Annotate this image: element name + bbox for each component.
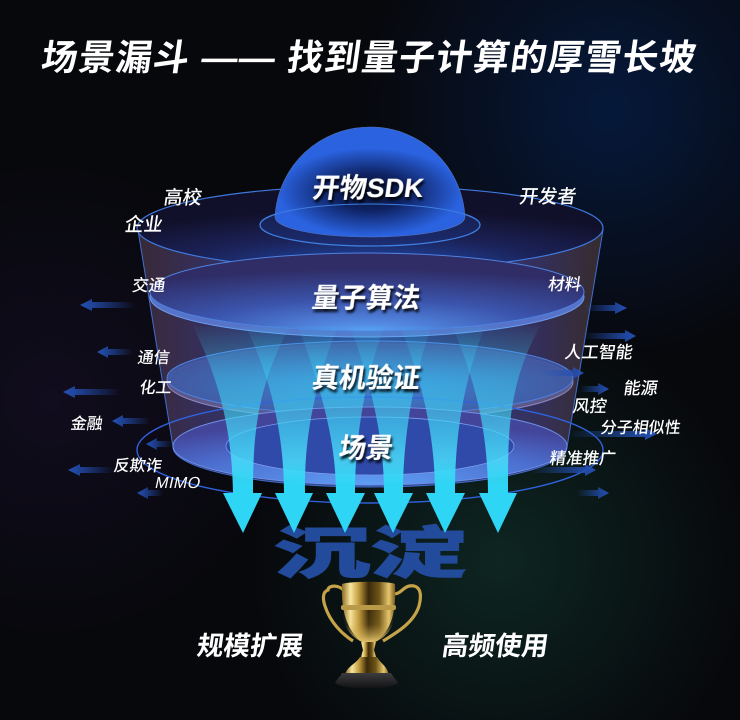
- right arrow: mid: [540, 367, 584, 379]
- arrow 3: [298, 326, 385, 533]
- right arrow: molecular similarity: [567, 428, 657, 440]
- left arrow: finance: [112, 415, 150, 427]
- layer 4 inner ellipse: [226, 417, 514, 475]
- label: scale expansion: 规模扩展: [195, 631, 305, 661]
- right arrow: materials: [585, 302, 627, 314]
- side labels: [69, 186, 682, 492]
- label: high frequency use: 高频使用: [440, 631, 550, 661]
- dome: [275, 127, 465, 237]
- layer 1 disc: [137, 186, 603, 270]
- arrow 1: [193, 326, 290, 533]
- layer 3 disc: [167, 341, 573, 415]
- inner ring under dome: [260, 204, 480, 246]
- funnel arrows: [193, 326, 540, 533]
- arrow 6: [452, 326, 540, 533]
- label: molecular similarity: 分子相似性: [599, 419, 682, 437]
- trophy foot: [345, 657, 389, 675]
- dome ring front: [260, 204, 480, 225]
- right arrow: AI: [583, 330, 636, 342]
- label: risk control: 风控: [571, 397, 608, 416]
- trophy right handle: [383, 586, 420, 641]
- label: precision marketing: 精准推广: [548, 449, 617, 468]
- trophy left handle: [323, 586, 353, 641]
- funnel body: [138, 230, 603, 487]
- arrow 2: [245, 326, 338, 533]
- layer 4 outer ring: [137, 397, 603, 503]
- label: universities: 高校: [162, 187, 203, 209]
- layer 4 disc: [173, 407, 567, 485]
- label: enterprises: 企业: [123, 214, 164, 236]
- layer 2 rim: [150, 257, 584, 337]
- trophy band: [341, 605, 396, 610]
- arrow 5: [400, 326, 485, 533]
- left arrow: telecom: [97, 346, 133, 358]
- label: chemical: 化工: [138, 379, 173, 397]
- label: AI: 人工智能: [563, 343, 634, 362]
- label: anti-fraud: 反欺诈: [112, 457, 163, 475]
- left arrow: mid: [146, 438, 172, 450]
- icon: trophy: [323, 582, 420, 688]
- left arrow: mimo: [137, 487, 163, 499]
- trophy stem: [360, 642, 377, 660]
- left arrow: chemical: [63, 386, 120, 398]
- label: developers: 开发者: [518, 186, 578, 208]
- layer 3 rim: [167, 344, 573, 420]
- left arrow: transport: [80, 299, 135, 311]
- label: open SDK: 开物SDK: [311, 172, 426, 203]
- label: materials: 材料: [547, 275, 583, 294]
- label: scenarios: 场景: [337, 432, 395, 463]
- left arrow: fraud: [68, 464, 113, 476]
- funnel: layered cylinders: [137, 127, 603, 503]
- trophy cup: [342, 582, 395, 642]
- sedimentation word: 沉淀: [274, 523, 466, 585]
- label: transport: 交通: [131, 275, 167, 295]
- label: energy: 能源: [622, 379, 659, 398]
- right arrow: bottom: [577, 487, 609, 499]
- label: finance: 金融: [69, 414, 104, 433]
- label: real machine validation: 真机验证: [310, 362, 422, 393]
- outward arrows left: [63, 299, 172, 499]
- right arrow: marketing: [530, 464, 596, 476]
- label: MIMO: MIMO: [153, 474, 203, 492]
- trophy base: [335, 673, 398, 688]
- outward arrows right: [530, 302, 657, 499]
- right arrow: energy: [580, 383, 609, 395]
- trophy cup highlight: [342, 610, 395, 642]
- layer 2 disc: [150, 253, 584, 331]
- layer labels: [310, 172, 426, 463]
- label: telecom: 通信: [136, 349, 171, 367]
- label: quantum algorithms: 量子算法: [310, 282, 422, 313]
- arrow 4: [350, 326, 432, 533]
- title: 场景漏斗 —— 找到量子计算的厚雪长坡: [39, 37, 699, 78]
